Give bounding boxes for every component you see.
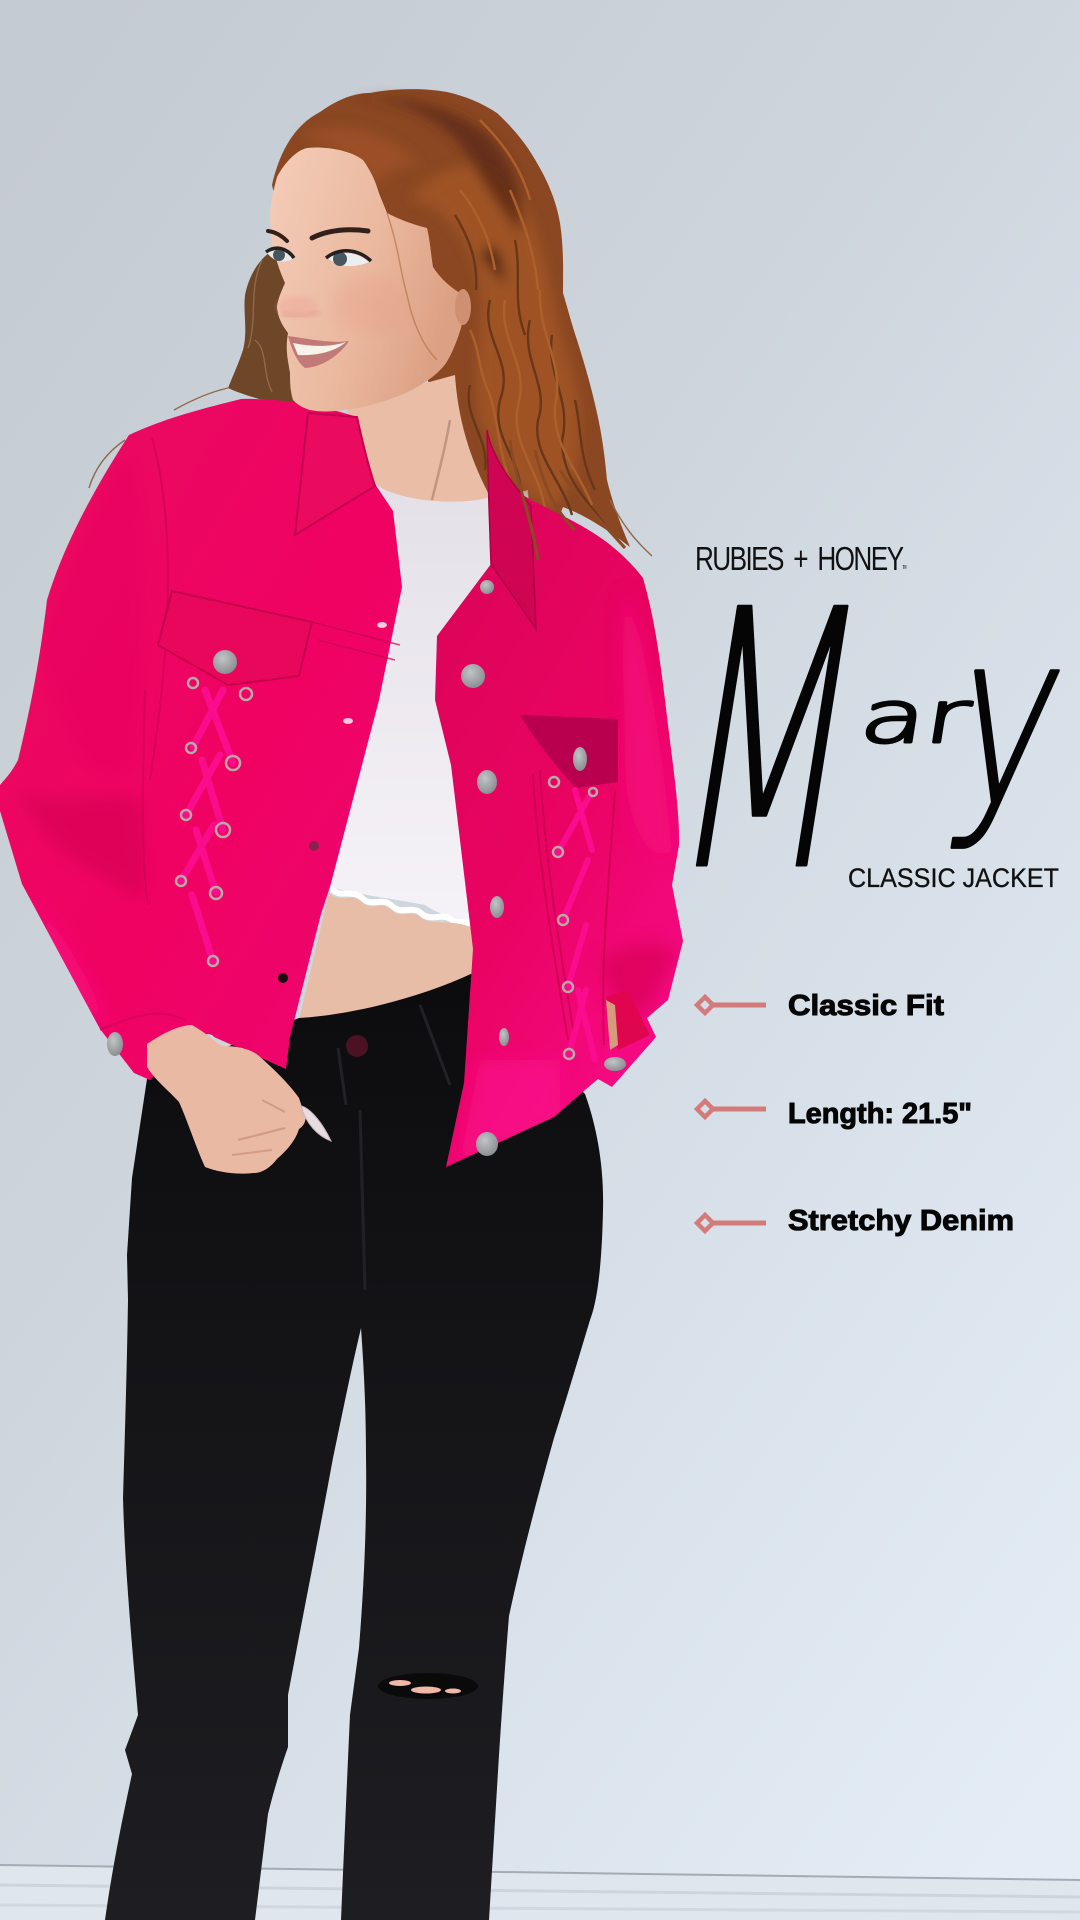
jacket left panel (0, 399, 402, 1080)
ear (455, 289, 471, 325)
nose (278, 296, 320, 318)
label: Stretchy Denim (788, 1205, 1014, 1237)
jeans button (346, 1035, 368, 1057)
eyes (266, 248, 371, 266)
feature: Classic Fit (697, 990, 944, 1022)
side hair strand (387, 213, 437, 360)
icon: arrow pointer (697, 997, 766, 1013)
left buttons (107, 650, 237, 1056)
feature: Stretchy Denim (697, 1205, 1014, 1237)
smile (288, 336, 349, 368)
brand logo: TM (902, 565, 906, 571)
icon: arrow pointer (697, 1101, 766, 1117)
left snap details (278, 622, 387, 983)
label: Classic Fit (788, 990, 944, 1022)
left collar (295, 413, 375, 535)
left sleeve shading (29, 625, 146, 1020)
hand with manicured nail (147, 1025, 331, 1174)
feature: Length (697, 1098, 972, 1130)
left lacing (181, 690, 233, 961)
right collar (487, 430, 536, 629)
white crop top (321, 484, 500, 930)
eyebrows (268, 230, 368, 241)
cheek blush (332, 277, 408, 333)
baseboard (0, 1865, 1080, 1920)
title: Mary script: ar (855, 676, 976, 760)
title: Mary script: M (651, 536, 891, 949)
right grommets (549, 777, 597, 1059)
left grommets (176, 678, 252, 966)
right buttons (461, 580, 626, 1156)
model photo (0, 89, 683, 1920)
right cuff opening (606, 990, 650, 1050)
brand logo: RUBIES + HONEY (695, 540, 957, 577)
neck and chest (345, 375, 492, 505)
icon: arrow pointer (697, 1215, 766, 1231)
face (266, 148, 471, 412)
label: Length: 21.5" (788, 1098, 972, 1130)
jacket right panel (435, 430, 683, 1167)
bare midriff (299, 893, 476, 1020)
neck shadow (432, 420, 450, 500)
left curls (228, 245, 310, 410)
left chest pocket (158, 591, 312, 685)
hair (89, 89, 652, 600)
right lacing (558, 790, 595, 1060)
hair highlights (300, 98, 581, 510)
nail (301, 1106, 331, 1141)
knee tear (378, 1673, 478, 1699)
right panel shading (460, 590, 678, 1160)
hair locks over right collar (510, 440, 625, 560)
subtitle: CLASSIC JACKET (848, 863, 1059, 893)
black jeans (105, 973, 603, 1920)
curls (455, 215, 610, 532)
right chest pocket (520, 715, 618, 788)
